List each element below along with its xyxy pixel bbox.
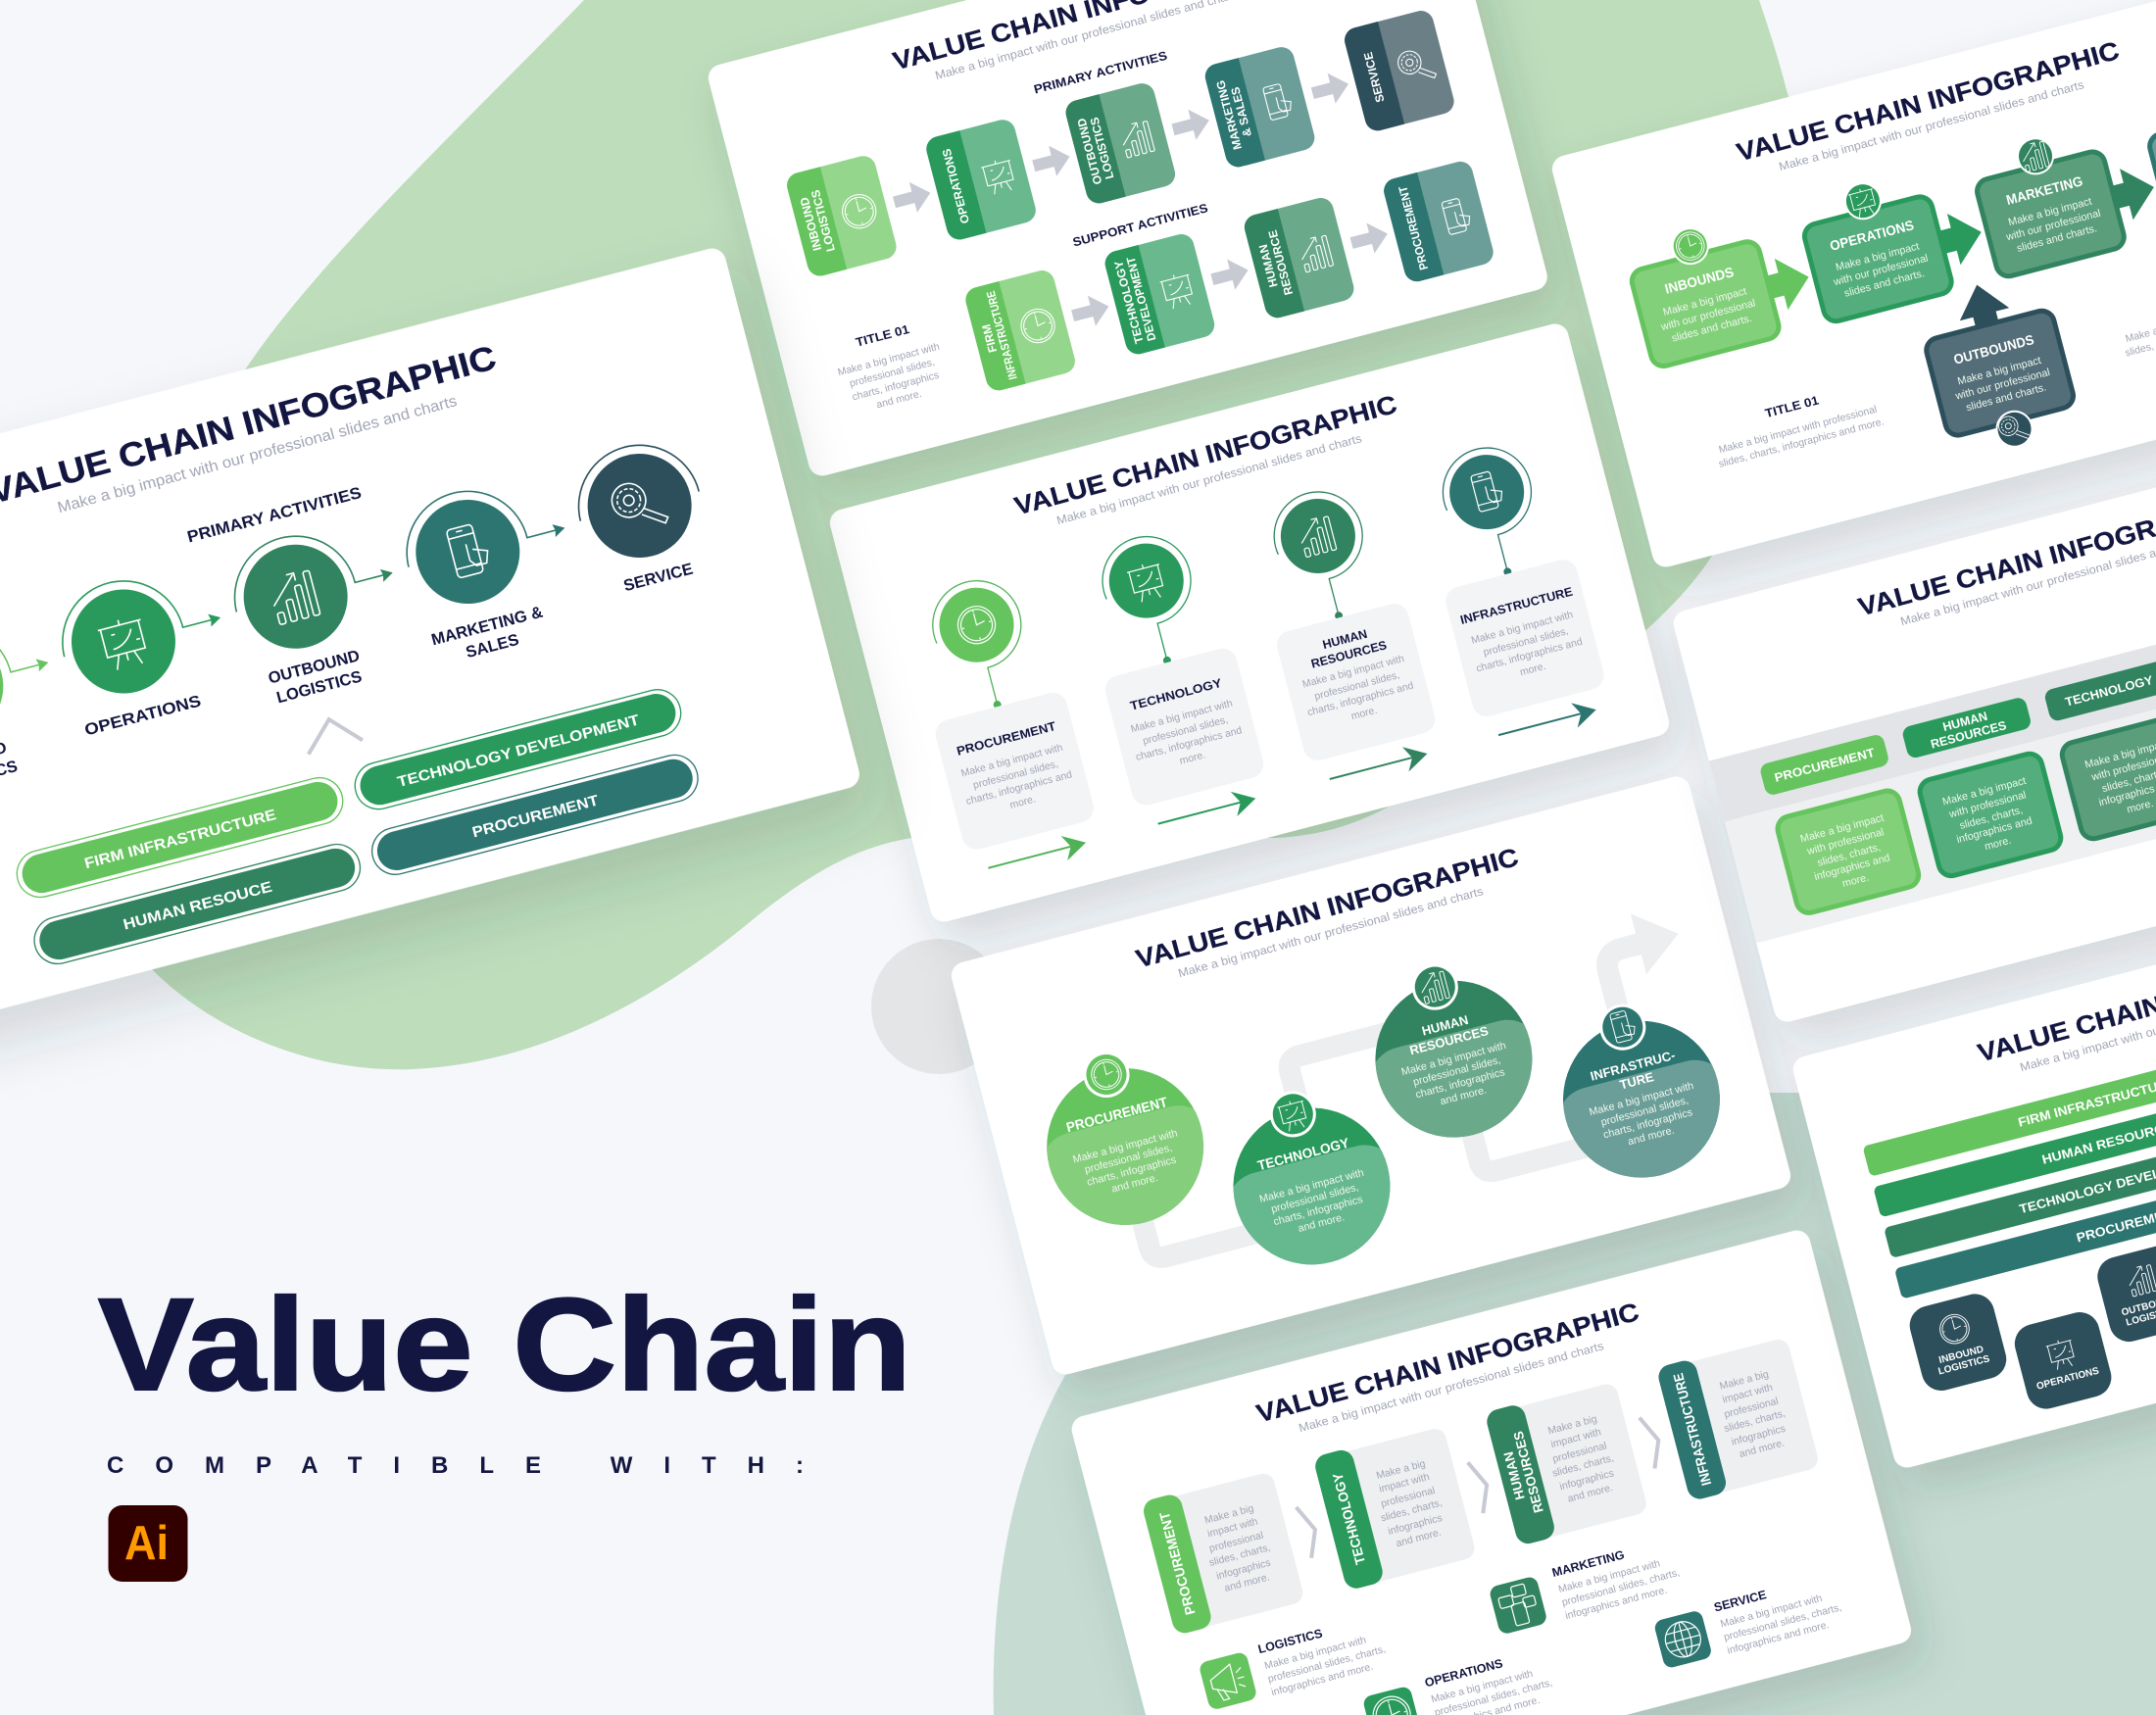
step: technology: TECHNOLOGY xyxy=(1129,676,1224,713)
box: operations: OPERATIONS xyxy=(1828,217,1916,254)
step: human resources: charts, infographics xyxy=(1414,1066,1506,1101)
box: outbounds xyxy=(1913,269,2082,463)
box: operations xyxy=(1795,157,1994,324)
bar: firm infrastructure xyxy=(1862,978,2156,1177)
card: technology development xyxy=(1102,231,1217,357)
column: human resources xyxy=(1901,696,2064,879)
arrow xyxy=(1348,219,1392,259)
card: human resources: Make a big xyxy=(1546,1413,1598,1437)
step: human resources: charts, infographics and xyxy=(1306,680,1415,718)
step: procurement: charts, infographics xyxy=(1086,1153,1178,1189)
column: procurement: with professional xyxy=(1805,826,1886,858)
step: human resources: HUMAN xyxy=(1420,1012,1470,1039)
arrow xyxy=(1069,291,1112,331)
panel: slide with circle steps on a track: Make a big impact with our professional slides and charts xyxy=(1177,884,1485,980)
card: technology: professional xyxy=(1380,1485,1437,1510)
text block: title 01: TITLE 01 xyxy=(855,322,910,350)
arrow xyxy=(890,177,934,218)
panel: slide with vertical bars and icon items: Make a big impact with our professional slides and charts xyxy=(1298,1339,1605,1435)
item: marketing: professional slides, charts, xyxy=(1560,1567,1681,1609)
card: procurement: infographics xyxy=(1215,1557,1272,1583)
box: marketing: MARKETING xyxy=(2004,172,2084,208)
column: human resources: more. xyxy=(1984,835,2013,853)
card: outbound logistics xyxy=(1063,80,1178,206)
step: human resources: professional slides, xyxy=(1313,669,1400,703)
card: technology: infographics xyxy=(1387,1512,1444,1538)
step: procurement xyxy=(1047,1054,1203,1225)
step: outbound logistics: LOGISTICS xyxy=(274,666,364,707)
card: firm infrastructure: INFRASTRUCTURE xyxy=(984,289,1020,381)
column: human resources: RESOURCES xyxy=(1930,718,2008,752)
background circle: grey xyxy=(871,939,1006,1074)
arrow: chevron xyxy=(1297,1504,1322,1558)
arrow: chevron xyxy=(1640,1414,1665,1469)
card: infrastructure: and more. xyxy=(1738,1437,1786,1460)
step: infrastructure: Make a big impact with xyxy=(1588,1080,1695,1118)
box: inbounds: slides and charts. xyxy=(1671,313,1753,345)
tile: operations xyxy=(2010,1308,2116,1413)
card: procurement: impact with xyxy=(1206,1516,1259,1540)
panel: slide with stacked bars and squares xyxy=(1790,867,2156,1471)
step: technology: professional slides, xyxy=(1142,713,1229,748)
step: procurement: charts, infographics and xyxy=(964,768,1073,808)
item: logistics: professional slides, charts, xyxy=(1266,1643,1387,1686)
card: human resource: RESOURCE xyxy=(1265,228,1296,297)
background blob: sage green xyxy=(994,1093,2156,1715)
panel: slide with vertical bars and icon items xyxy=(1069,1227,1914,1715)
card: human resources: HUMAN xyxy=(1501,1450,1528,1501)
item: marketing: Make a big impact with xyxy=(1557,1557,1661,1595)
panel: slide with pin circles and cards: VALUE CHAIN INFOGRAPHIC xyxy=(1011,389,1400,521)
column: human resources: infographics and xyxy=(1955,815,2034,846)
step: technology: charts, infographics and xyxy=(1135,724,1244,763)
step: human resources xyxy=(1242,476,1446,796)
pill: firm infrastructure xyxy=(12,772,348,903)
bar: human resource xyxy=(1873,1019,2156,1217)
card: inbound logistics: INBOUND xyxy=(797,195,824,252)
panel: large slide with circular steps and pills: PRIMARY ACTIVITIES xyxy=(185,483,364,546)
step: outbound logistics xyxy=(221,514,416,711)
card: marketing and sales xyxy=(1202,44,1317,170)
card: human resources: infographics xyxy=(1558,1467,1615,1493)
step: procurement: PROCUREMENT xyxy=(956,719,1057,759)
panel: slide with bordered boxes and block arrows: VALUE CHAIN INFOGRAPHIC xyxy=(1734,35,2123,168)
column: technology: TECHNOLOGY xyxy=(2064,673,2155,710)
card: marketing and sales: & SALES xyxy=(1228,85,1254,138)
step: procurement: PROCUREMENT xyxy=(1064,1094,1169,1135)
item: logistics: infographics and more. xyxy=(1270,1661,1374,1698)
panel: slide with circle steps on a track: VALUE CHAIN INFOGRAPHIC xyxy=(1133,842,1522,974)
step: technology: TECHNOLOGY xyxy=(1255,1134,1351,1173)
step: technology: professional slides, xyxy=(1270,1182,1360,1215)
card: infrastructure: Make a big xyxy=(1718,1368,1770,1393)
step: infrastructure: and more. xyxy=(1627,1124,1676,1148)
step: infrastructure xyxy=(1563,1004,1720,1178)
step: procurement: Make a big impact with xyxy=(959,742,1064,779)
text block: title 01: Make a big impact with xyxy=(837,341,941,378)
step: infrastructure: professional slides, xyxy=(1599,1095,1690,1129)
panel: slide with primary and support activity cards: SUPPORT ACTIVITIES xyxy=(1071,201,1209,250)
tile: inbound logistics: LOGISTICS xyxy=(1937,1353,1991,1378)
box: outbounds: Make a big impact xyxy=(1956,355,2042,388)
step: human resources: RESOURCES xyxy=(1309,638,1388,671)
card: service: SERVICE xyxy=(1361,51,1388,104)
step: technology: and more. xyxy=(1297,1211,1346,1235)
step: human resources: and more. xyxy=(1439,1084,1488,1107)
step: marketing and sales: SALES xyxy=(464,630,520,662)
box: operations: with our professional xyxy=(1832,253,1930,288)
box: marketing xyxy=(1968,112,2156,279)
step: infrastructure: INFRASTRUCTURE xyxy=(1459,585,1574,627)
card: firm infrastructure: FIRM xyxy=(979,322,1000,354)
card: outbound logistics: OUTBOUND xyxy=(1074,117,1104,186)
column: procurement: Make a big impact xyxy=(1799,812,1886,845)
item: marketing: MARKETING xyxy=(1550,1547,1626,1580)
item: operations xyxy=(1360,1645,1557,1715)
item: service: infographics and more. xyxy=(1726,1619,1831,1657)
panel: slide with primary and support activity cards: PRIMARY ACTIVITIES xyxy=(1032,49,1168,96)
step: infrastructure: Make a big impact with xyxy=(1470,609,1575,647)
step: infrastructure: INFRASTRUC- xyxy=(1589,1048,1677,1084)
text block: title 01: professional slides, xyxy=(849,356,936,390)
card: human resources: RESOURCES xyxy=(1511,1430,1546,1514)
card: operations: OPERATIONS xyxy=(940,147,972,225)
step: human resources: more. xyxy=(1350,705,1379,722)
card: procurement: professional xyxy=(1208,1530,1264,1554)
step: human resources: Make a big impact with xyxy=(1301,653,1405,691)
panel: slide with header tabs and bordered cards xyxy=(1671,421,2156,1025)
pill: human resouce: HUMAN RESOUCE xyxy=(122,879,274,933)
card: human resources xyxy=(1484,1379,1649,1546)
panel: large slide with circular steps and pills xyxy=(0,245,862,1040)
card: infrastructure: slides, charts, xyxy=(1723,1407,1787,1435)
panel: slide with circle steps on a track xyxy=(949,773,1793,1378)
step: procurement: Make a big impact with xyxy=(1071,1127,1179,1166)
pill: technology development xyxy=(350,685,686,814)
panel: slide with bordered boxes and block arrows: Make a big impact with our professional slides and charts xyxy=(1778,77,2085,173)
column: technology: more. xyxy=(2126,798,2155,815)
compatible with label: COMPATIBLE WITH: xyxy=(107,1452,804,1479)
pill: firm infrastructure: FIRM INFRASTRUCTURE xyxy=(82,807,278,872)
card: outbound logistics: LOGISTICS xyxy=(1088,116,1116,180)
band: header background xyxy=(1709,568,2156,821)
step: technology xyxy=(1070,521,1275,841)
text block: title 01: Make a big impact with professional xyxy=(1718,404,1879,456)
step: human resources: RESOURCES xyxy=(1408,1023,1491,1057)
step: procurement xyxy=(900,565,1105,885)
panel: large slide with circular steps and pills: Make a big impact with our professional slides and charts xyxy=(56,393,459,516)
step: outbound logistics: OUTBOUND xyxy=(267,646,362,688)
step: procurement: professional slides, xyxy=(972,759,1059,792)
item: logistics: Make a big impact with xyxy=(1263,1635,1367,1672)
box: inbounds: Make a big impact xyxy=(1662,285,1748,318)
icon: Adobe Illustrator badge xyxy=(108,1505,188,1582)
box: outbounds: OUTBOUNDS xyxy=(1952,331,2035,368)
item: service xyxy=(1652,1570,1846,1673)
step: service: SERVICE xyxy=(621,560,695,595)
item: operations: Make a big impact with xyxy=(1430,1668,1535,1705)
box: outbounds: slides and charts. xyxy=(1965,381,2047,414)
step: human resources xyxy=(1376,966,1533,1138)
text block: title 01: and more. xyxy=(875,388,923,411)
card: service xyxy=(1342,8,1456,133)
step: infrastructure: TURE xyxy=(1618,1069,1655,1093)
step: technology: Make a big impact with xyxy=(1258,1167,1365,1205)
step: procurement: and more. xyxy=(1110,1172,1159,1196)
column: procurement xyxy=(1759,733,1921,916)
card: technology: slides, charts, xyxy=(1380,1497,1444,1524)
card: technology: and more. xyxy=(1395,1527,1443,1549)
item: marketing: infographics and more. xyxy=(1564,1585,1668,1622)
column: procurement: infographics and xyxy=(1813,852,1891,883)
arrow xyxy=(1208,255,1252,295)
item: service: Make a big impact with xyxy=(1719,1592,1824,1630)
item: service: professional slides, charts, xyxy=(1723,1601,1843,1643)
box: marketing: Make a big impact xyxy=(2007,196,2093,228)
card: procurement xyxy=(1141,1468,1305,1636)
box: next step, cropped by the canvas xyxy=(2147,104,2156,234)
step: operations: OPERATIONS xyxy=(82,691,203,740)
box: marketing: with our professional xyxy=(2004,208,2102,244)
step: infrastructure: professional slides, xyxy=(1482,625,1570,659)
item: logistics xyxy=(1197,1612,1391,1715)
card: infrastructure: impact with xyxy=(1721,1382,1774,1406)
card: operations xyxy=(923,117,1039,242)
box: inbounds: with our professional xyxy=(1659,297,1757,333)
step: procurement: professional slides, xyxy=(1083,1142,1173,1176)
card: inbound logistics xyxy=(784,153,899,278)
card: procurement: PROCUREMENT xyxy=(1156,1510,1199,1617)
card: procurement: PROCUREMENT xyxy=(1396,184,1431,271)
card: technology development: TECHNOLOGY xyxy=(1111,259,1147,345)
card: human resources: slides, charts, xyxy=(1551,1452,1615,1480)
pill: procurement: PROCUREMENT xyxy=(470,792,601,841)
box: outbounds: with our professional xyxy=(1953,367,2051,403)
column: procurement: more. xyxy=(1841,871,1870,890)
card: technology: TECHNOLOGY xyxy=(1329,1471,1368,1566)
column: procurement: PROCUREMENT xyxy=(1773,746,1877,785)
card: procurement: Make a big xyxy=(1203,1502,1255,1527)
card: human resources: and more. xyxy=(1566,1482,1614,1505)
pill: human resouce xyxy=(29,839,366,969)
band: card background xyxy=(1725,629,2156,943)
column: human resources: Make a big impact xyxy=(1941,775,2028,808)
main title: Value Chain xyxy=(98,1272,911,1418)
step: technology: Make a big impact with xyxy=(1130,698,1234,735)
card: human resource: HUMAN xyxy=(1256,243,1281,289)
box: inbounds xyxy=(1622,202,1821,368)
tile: operations: OPERATIONS xyxy=(2035,1366,2100,1393)
arrow xyxy=(1169,105,1213,145)
card: human resources: professional xyxy=(1551,1440,1608,1465)
tile: inbound logistics: INBOUND xyxy=(1937,1345,1984,1366)
arrow: chevron xyxy=(1468,1459,1494,1514)
panel: slide with primary and support activity cards xyxy=(706,0,1550,479)
arrow xyxy=(1030,141,1074,181)
icon: Adobe Illustrator badge: Ai xyxy=(124,1517,169,1570)
panel: slide with pin circles and cards xyxy=(827,320,1672,925)
step: infrastructure: more. xyxy=(1519,661,1547,678)
step: human resources: HUMAN xyxy=(1321,627,1369,652)
bar: procurement xyxy=(1894,1101,2156,1299)
column: human resources: slides, charts, xyxy=(1958,805,2024,832)
card: infrastructure: professional xyxy=(1723,1396,1780,1421)
card: infrastructure: infographics xyxy=(1730,1423,1787,1448)
card: procurement: slides, charts, xyxy=(1208,1542,1272,1569)
column: human resources: with professional xyxy=(1947,789,2028,820)
tile: inbound logistics xyxy=(1905,1290,2011,1395)
pill: procurement xyxy=(367,750,703,880)
text block: title 01 xyxy=(1708,379,1886,470)
box: marketing: slides and charts. xyxy=(2016,222,2098,255)
card: technology: impact with xyxy=(1378,1471,1431,1495)
step: infrastructure: charts, infographics xyxy=(1602,1106,1694,1141)
column: technology xyxy=(2043,659,2156,842)
step: marketing and sales xyxy=(394,468,590,670)
text block: title 01: slides, charts, infographics and more. xyxy=(1717,416,1886,470)
pill: technology development: TECHNOLOGY DEVELOPMENT xyxy=(396,711,642,791)
card: technology: Make a big xyxy=(1375,1457,1427,1482)
card: procurement xyxy=(1381,159,1496,284)
arrow: up chevron xyxy=(301,712,363,755)
column: human resources: HUMAN xyxy=(1941,710,1988,734)
step: procurement: more. xyxy=(1008,794,1037,811)
card: marketing and sales: MARKETING xyxy=(1213,78,1245,151)
step: technology: charts, infographics xyxy=(1272,1194,1364,1228)
card: human resources: impact with xyxy=(1549,1426,1602,1450)
step: technology: more. xyxy=(1178,749,1206,767)
step: marketing and sales: MARKETING & xyxy=(429,603,545,649)
panel: slide with bordered boxes and block arrows xyxy=(1549,0,2156,570)
step: human resources: Make a big impact with xyxy=(1400,1040,1507,1078)
item: operations: OPERATIONS xyxy=(1423,1656,1504,1690)
item: logistics: LOGISTICS xyxy=(1256,1627,1324,1656)
box: inbounds: INBOUNDS xyxy=(1663,264,1736,297)
column: procurement: slides, charts, xyxy=(1816,842,1882,869)
tile: outbound logistics xyxy=(2093,1241,2156,1346)
item: marketing xyxy=(1487,1536,1685,1639)
card: infrastructure xyxy=(1656,1334,1821,1501)
card: firm infrastructure xyxy=(963,268,1078,393)
step: technology xyxy=(1233,1091,1390,1264)
card: human resource xyxy=(1242,195,1356,320)
panel: slide with vertical bars and icon items: VALUE CHAIN INFOGRAPHIC xyxy=(1253,1297,1642,1429)
panel: slide with pin circles and cards: Make a big impact with our professional slides and charts xyxy=(1055,431,1363,527)
box: operations: Make a big impact xyxy=(1835,240,1921,273)
arrow: grey winding track xyxy=(1099,904,1725,1260)
arrow xyxy=(1308,69,1352,109)
card: technology xyxy=(1312,1424,1477,1592)
card: procurement: and more. xyxy=(1223,1571,1271,1594)
background blob: light green xyxy=(103,0,1799,1069)
text block: title 01: TITLE 01 xyxy=(1764,393,1820,420)
step: service xyxy=(565,432,719,602)
card: inbound logistics: LOGISTICS xyxy=(808,188,838,253)
bar: technology development xyxy=(1884,1060,2156,1258)
box: operations: slides and charts. xyxy=(1843,268,1926,300)
text block: title 01: charts, infographics xyxy=(851,369,940,403)
step: infrastructure xyxy=(1410,432,1615,752)
card: technology development: DEVELOPMENT xyxy=(1124,255,1158,342)
step: infrastructure: charts, infographics and xyxy=(1475,636,1584,674)
card: infrastructure: INFRASTRUCTURE xyxy=(1670,1371,1714,1488)
step: operations xyxy=(49,559,240,740)
text block: title 01 xyxy=(830,317,952,418)
step: human resources: professional slides, xyxy=(1412,1054,1502,1089)
step: inbound logistics xyxy=(0,603,73,801)
item: service: SERVICE xyxy=(1713,1588,1768,1615)
